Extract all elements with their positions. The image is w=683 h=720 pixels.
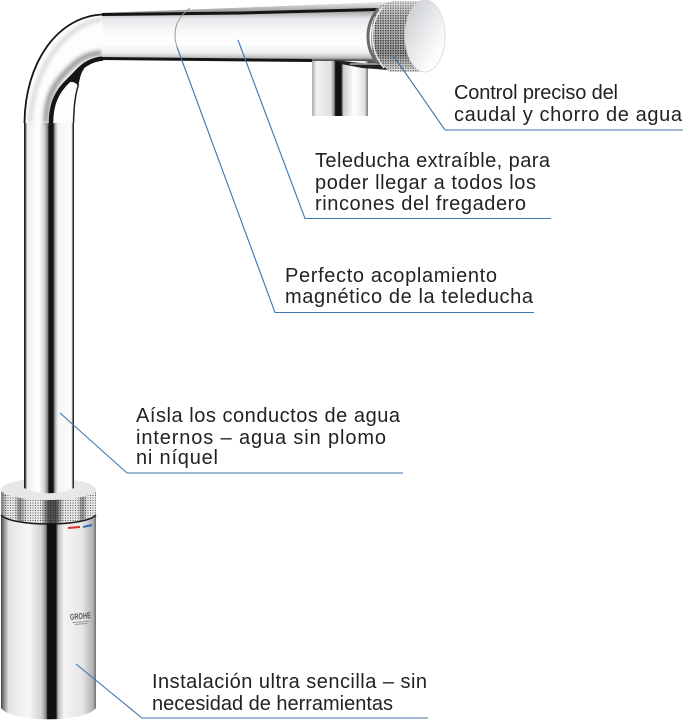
neck bottom [24, 470, 74, 493]
base [1, 470, 96, 719]
callout: control: caudal y chorro de agua [454, 104, 683, 126]
logo [70, 610, 92, 625]
knurled ring [1, 491, 96, 523]
temperature marks [68, 525, 92, 528]
callout: installation [76, 664, 428, 718]
callout: pull-out spray: rincones del fregadero [315, 193, 526, 215]
callout: pull-out spray: poder llegar a todos los [315, 172, 536, 194]
callout: installation: Instalación ultra sencilla – sin [152, 671, 427, 693]
arm corner [24, 13, 103, 123]
faucet neck and arm [24, 2, 388, 492]
icon: faucet [1, 0, 445, 719]
callout: insulation: internos – agua sin plomo [136, 427, 386, 449]
logo: GROHE [70, 610, 92, 622]
base top cap [1, 478, 96, 502]
callout: magnetic docking: magnético de la teleducha [285, 286, 534, 308]
callout: magnetic docking: Perfecto acoplamiento [285, 265, 497, 287]
callout: control: Control preciso del [454, 82, 618, 104]
callout: insulation [60, 405, 403, 473]
control knob [368, 0, 445, 72]
callout: pull-out spray: Teleducha extraíble, para [315, 150, 551, 172]
knob face [405, 0, 445, 72]
callout: insulation: ni níquel [136, 447, 218, 469]
spout outlet [312, 60, 388, 116]
callout: control [393, 55, 683, 130]
callout: magnetic docking [175, 8, 534, 312]
callout: pull-out spray [238, 40, 551, 218]
callout: insulation: Aísla los conductos de agua [136, 405, 401, 427]
arm spout tube [102, 2, 388, 68]
callout: installation: necesidad de herramientas [152, 693, 393, 715]
